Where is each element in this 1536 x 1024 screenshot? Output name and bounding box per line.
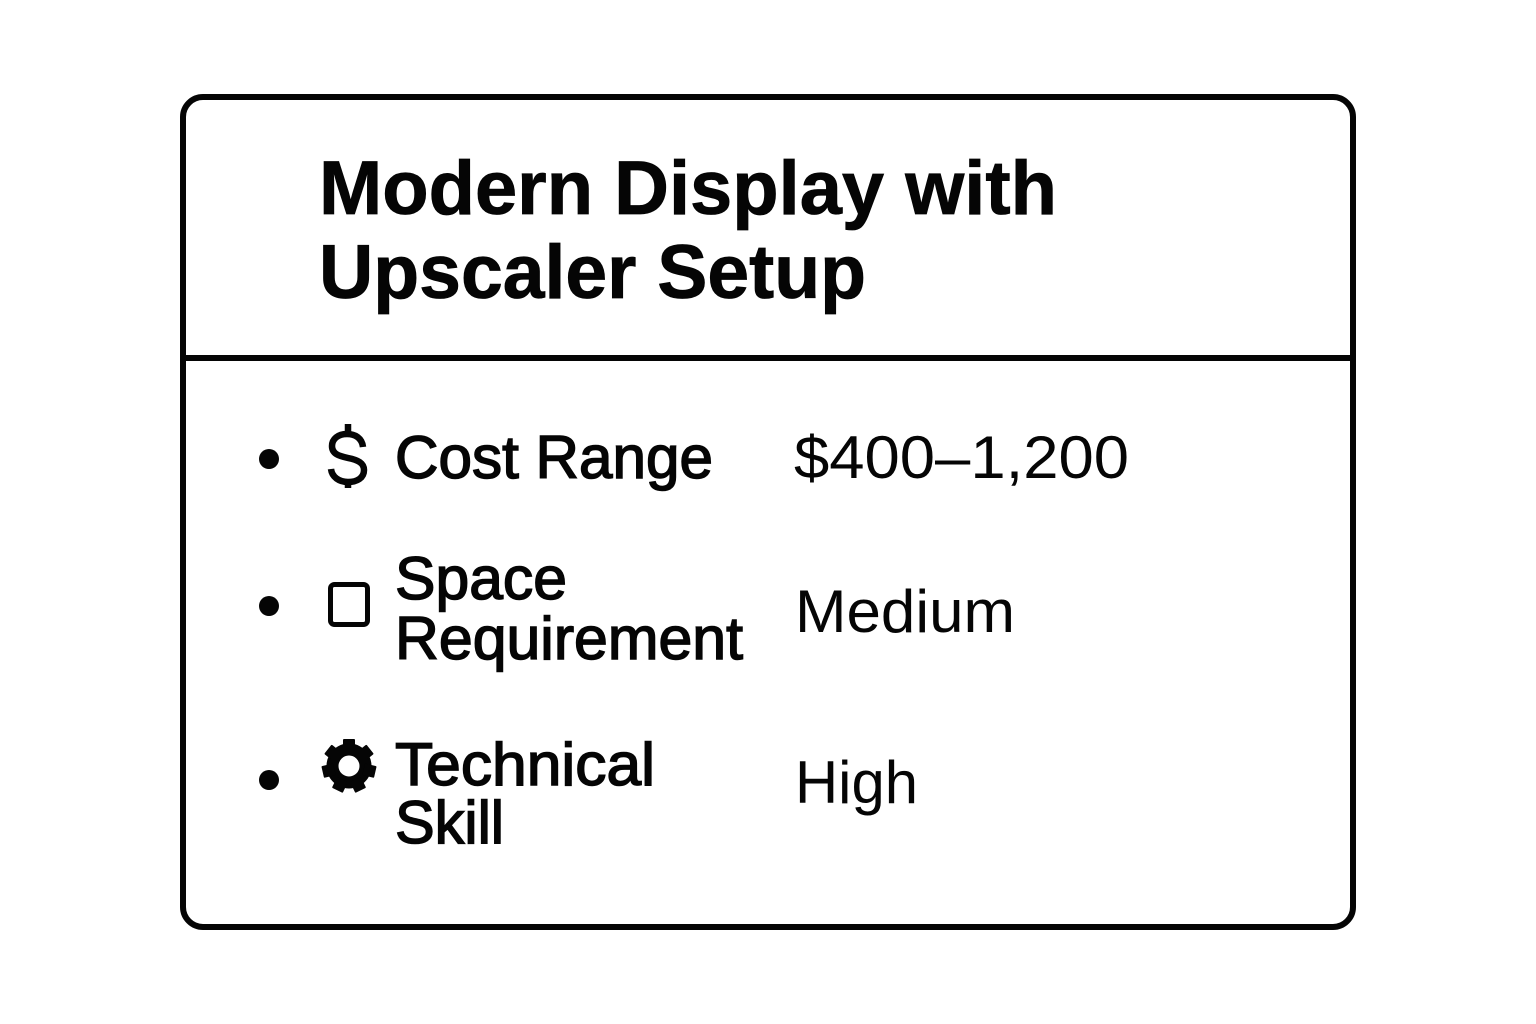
icon: gear — [321, 739, 377, 793]
row: technical skill — [259, 731, 918, 856]
label: Technical — [395, 731, 655, 798]
label: Skill — [395, 789, 504, 856]
bullet — [259, 596, 279, 616]
value: Medium — [795, 578, 1015, 645]
label — [395, 731, 655, 856]
label — [395, 545, 743, 672]
value: $400–1,200 — [794, 424, 1129, 491]
label: Requirement — [395, 605, 743, 672]
icon: dollar sign — [331, 424, 364, 488]
title: Modern Display with — [319, 146, 1057, 231]
bullet — [259, 449, 279, 469]
card border — [183, 97, 1353, 927]
title: Upscaler Setup — [319, 230, 866, 315]
label: Cost Range — [395, 424, 713, 491]
value: High — [795, 749, 918, 816]
panel: setup card — [183, 97, 1353, 927]
label: Space — [395, 545, 567, 612]
icon: square — [330, 584, 368, 624]
bullet — [259, 770, 279, 790]
row: space requirement — [259, 545, 1015, 672]
title — [319, 146, 1057, 315]
header divider — [186, 355, 1350, 361]
row: cost range — [259, 424, 1129, 491]
